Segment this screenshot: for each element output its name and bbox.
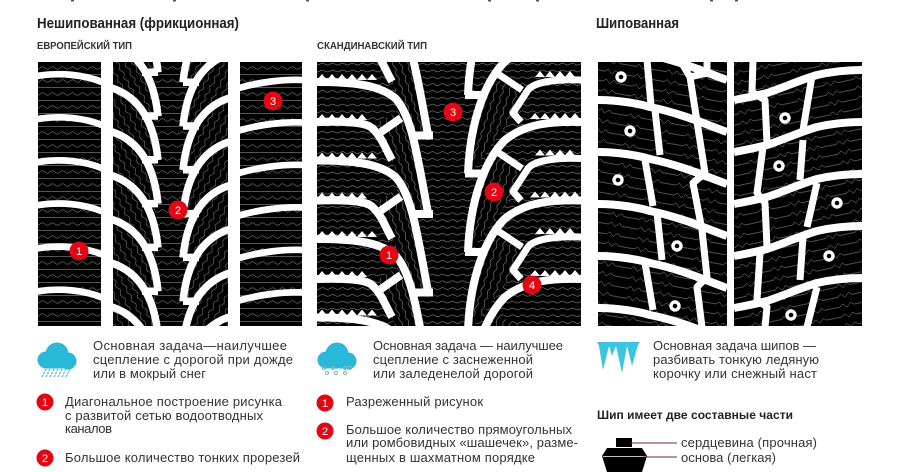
feature 2, european: Большое количество тонких прорезей xyxy=(65,450,300,465)
heading: studded: Шипованная xyxy=(596,15,679,32)
feature 1, european: 1 xyxy=(42,397,48,409)
text: main task, european xyxy=(93,338,293,381)
text: main task, scandinavian xyxy=(373,338,563,381)
feature 2, scandinavian: или ромбовидных «шашечек», разме- xyxy=(346,435,578,450)
feature 1, european: Диагональное построение рисунка xyxy=(65,394,283,409)
heading: stud parts: Шип имеет две составные части xyxy=(597,408,793,422)
tread: studded xyxy=(598,62,862,326)
text: main task, studded xyxy=(653,338,819,381)
feature 2, scandinavian: Большое количество прямоугольных xyxy=(346,422,572,437)
heading: non-studded: Нешипованная (фрикционная) xyxy=(37,15,239,32)
marker 3 xyxy=(264,92,282,110)
marker 1: 1 xyxy=(386,250,392,262)
marker 1 xyxy=(380,246,398,264)
marker 2: 2 xyxy=(491,187,497,199)
feature 1, scandinavian: 1 xyxy=(322,398,328,410)
text: main task, scandinavian: или заледенелой дорогой xyxy=(373,366,533,381)
stud diagram: сердцевина (прочная) xyxy=(681,435,817,450)
feature 2, scandinavian: 2 xyxy=(322,426,328,438)
tread: european type xyxy=(38,62,302,326)
marker 3: 3 xyxy=(270,96,276,108)
clipped text line at the top edge xyxy=(71,0,738,2)
studs xyxy=(614,73,841,319)
feature 2, scandinavian xyxy=(316,422,578,465)
text: main task, european: или в мокрый снег xyxy=(93,366,206,381)
marker 2 xyxy=(484,182,504,202)
marker 4 xyxy=(522,276,542,294)
text: main task, scandinavian: Основная задача — наилучшее xyxy=(373,338,563,353)
feature 1, european: каналов xyxy=(65,421,112,436)
marker 2 xyxy=(168,200,188,220)
feature 1, european xyxy=(36,394,283,436)
text: main task, european: сцепление с дорогой при дожде xyxy=(93,352,293,367)
feature 2, scandinavian: щенных в шахматном порядке xyxy=(346,450,535,465)
icon: rain cloud xyxy=(38,342,76,377)
marker 2: 2 xyxy=(175,205,181,217)
marker 1 xyxy=(70,242,88,260)
marker 4: 4 xyxy=(529,280,535,292)
subheading: european type: ЕВРОПЕЙСКИЙ ТИП xyxy=(37,39,132,52)
subheading: scandinavian type: СКАНДИНАВСКИЙ ТИП xyxy=(317,39,427,52)
text: main task, studded: корочку или снежный наст xyxy=(653,366,817,381)
text: main task, studded: Основная задача шипов — xyxy=(653,338,816,353)
marker 3 xyxy=(444,102,462,122)
text: main task, scandinavian: сцепление с заснеженной xyxy=(373,352,533,367)
marker 1: 1 xyxy=(76,246,82,258)
tread: scandinavian type xyxy=(317,62,581,326)
text: main task, european: Основная задача—наилучшее xyxy=(93,338,287,353)
stud diagram: основа (легкая) xyxy=(681,450,776,465)
marker 3: 3 xyxy=(450,107,456,119)
feature 2, european: 2 xyxy=(42,453,48,465)
feature 1, european: с развитой сетью водоотводных xyxy=(65,408,264,423)
icon: snow cloud xyxy=(318,342,356,375)
text: main task, studded: разбивать тонкую ледяную xyxy=(653,352,819,367)
stud diagram xyxy=(602,435,817,472)
icon: icicles xyxy=(597,342,640,373)
feature 1, scandinavian: Разреженный рисунок xyxy=(346,394,483,409)
